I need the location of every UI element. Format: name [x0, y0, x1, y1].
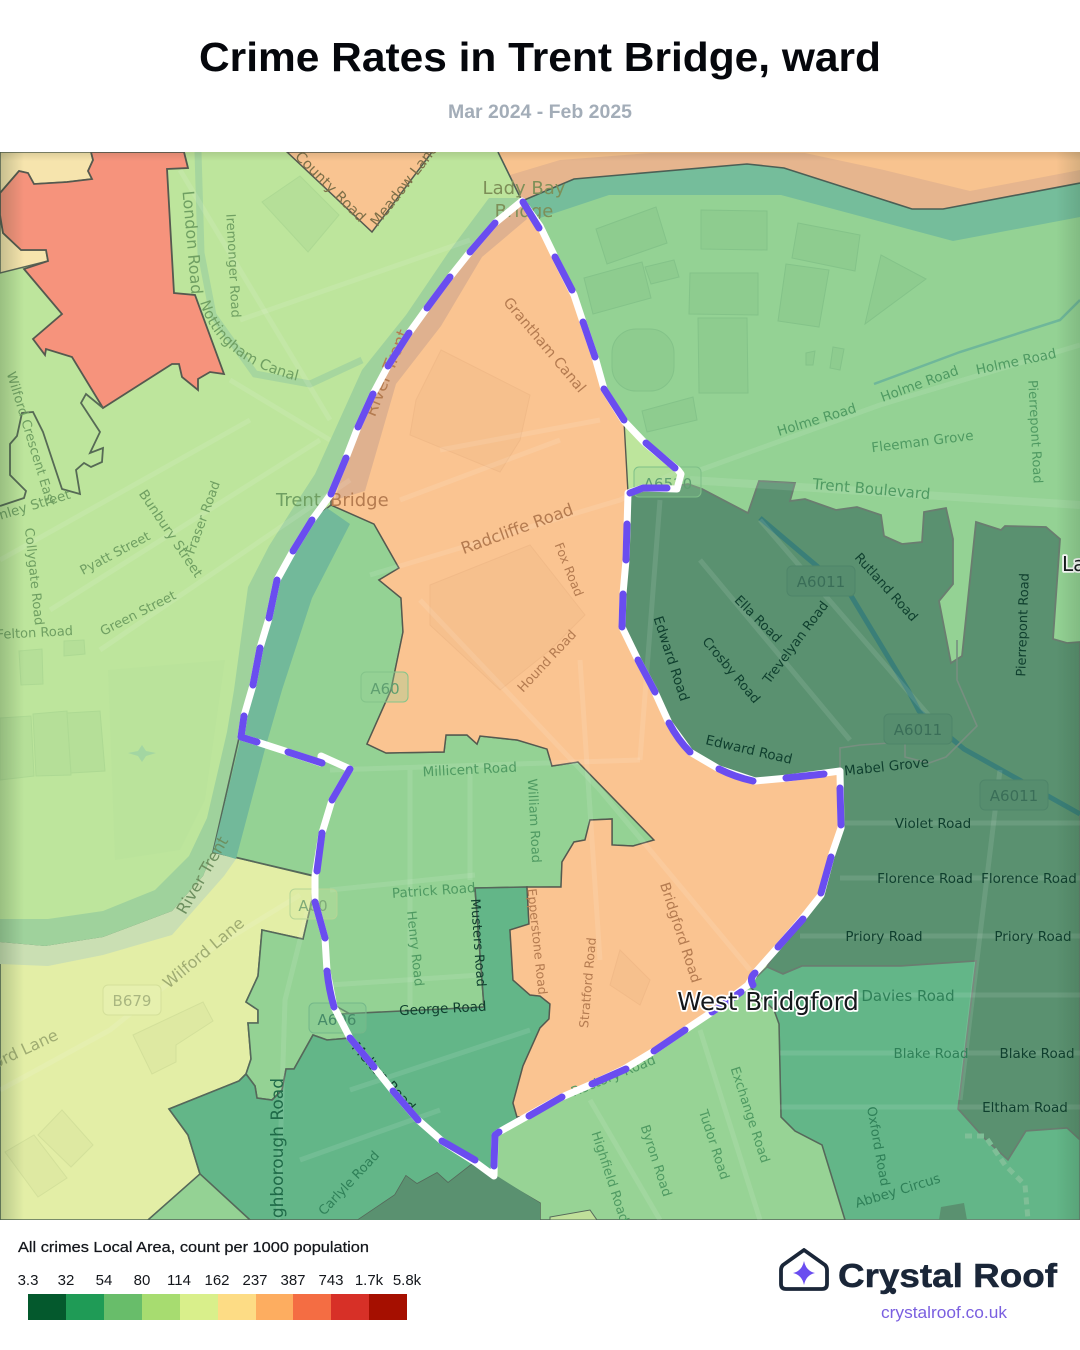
legend values: 237	[242, 1272, 268, 1289]
labels: south east: Oxford Road	[863, 1105, 892, 1187]
labels: south and centre: Tudor Road	[695, 1107, 732, 1182]
labels: west: Collygate Road	[21, 527, 46, 626]
area: small mid green south west	[148, 1174, 250, 1220]
teal river south of bridge	[213, 508, 350, 859]
labels: dark area: Crosby Road	[699, 635, 763, 707]
labels: south and centre	[391, 760, 772, 1224]
area: medium green south east	[748, 961, 1080, 1220]
area: outlined district west	[0, 394, 103, 506]
legend values	[18, 1272, 422, 1289]
legend	[18, 1239, 422, 1320]
labels: west: Green Street	[98, 588, 179, 639]
labels: dark area: Edward Road	[650, 614, 692, 703]
area: yellow lower left	[0, 852, 313, 1220]
logo	[779, 1248, 1058, 1322]
map edge shading	[0, 152, 1080, 1220]
labels: ward: River Trent	[361, 326, 414, 419]
labels: south and centre: Millicent Road	[422, 760, 517, 780]
shield: A606: A606	[318, 1011, 356, 1029]
labels: east: Holme Road	[878, 363, 961, 406]
labels: ward: Hound Road	[515, 628, 580, 696]
railway tracks	[965, 1136, 1028, 1220]
labels: south and centre: Patrick Road	[391, 880, 476, 902]
stadium tints in ward	[410, 350, 650, 1005]
labels: lady bay bridge: Lady Bay	[483, 178, 566, 199]
area: mid green east	[522, 164, 1080, 700]
legend colour scale	[28, 1294, 407, 1320]
ward boundary	[241, 201, 841, 1176]
labels: south and centre: Byron Road	[637, 1123, 674, 1199]
labels: east: Holme Road	[775, 401, 858, 440]
labels: east: Holme Road	[975, 346, 1058, 378]
gray boundary lines in dark area	[840, 640, 977, 770]
subtitle: Mar 2024 - Feb 2025	[448, 102, 632, 123]
logo website: crystalroof.co.uk	[881, 1304, 1008, 1322]
shield: A60 north	[361, 672, 408, 702]
labels: west: Fraser Road	[184, 479, 224, 556]
labels: ward: Bridge	[330, 490, 389, 511]
area: pale yellow top left	[0, 152, 93, 273]
buildings on yellow	[5, 1002, 213, 1197]
labels: ward: Epperstone Road	[524, 888, 551, 995]
labels: county road and meadow lane	[291, 141, 442, 230]
labels: dark area: George Road	[399, 999, 487, 1019]
labels: south east: Abbey Circus	[853, 1171, 942, 1212]
labels: west: Pyatt Street	[78, 529, 153, 579]
logo keyhole dot	[890, 1288, 896, 1294]
labels: west: Nottingham Canal	[200, 300, 298, 380]
shield: A60 south: A60	[298, 897, 328, 915]
title: Crime Rates in Trent Bridge, ward	[199, 34, 881, 80]
labels: ward: Grantham Canal	[500, 295, 588, 396]
labels: east: Pierrepont Road	[1024, 380, 1045, 484]
footer	[18, 1239, 1058, 1322]
shield: A60 north: A60	[370, 680, 400, 698]
legend values: 3.3	[18, 1272, 38, 1289]
legend values: 162	[204, 1272, 230, 1289]
shield: B679: B679	[113, 992, 151, 1010]
area: red high crime	[0, 152, 224, 408]
labels: dark area: Melton Road	[348, 1040, 418, 1115]
labels: south east: Blake Road	[893, 1046, 969, 1062]
legend values: 32	[58, 1272, 74, 1289]
shield: A6011 centre	[884, 714, 952, 744]
legend values: 743	[318, 1272, 344, 1289]
legend values: 387	[280, 1272, 306, 1289]
shield: A6520	[634, 467, 701, 497]
labels: west: London Road	[178, 190, 206, 295]
nottingham canal water	[198, 152, 362, 384]
legend title: All crimes Local Area, count per 1000 population	[18, 1239, 369, 1256]
labels: dark area: Musters Road	[467, 898, 488, 987]
area: orange ward interior	[331, 201, 841, 1117]
labels: dark area: Violet Road	[895, 816, 971, 832]
labels: ward: Radcliffe Road	[458, 500, 576, 558]
base area: low crime light green	[0, 152, 1080, 1220]
labels: south and centre: Henry Road	[403, 910, 426, 987]
canal east	[874, 300, 1080, 384]
labels: west: Bunbury Street	[135, 487, 206, 581]
labels: lady bay bridge: Bridge	[495, 201, 553, 222]
river trent band west	[0, 198, 522, 946]
river trent teal east	[522, 164, 1080, 241]
park tint west	[108, 660, 225, 860]
labels: dark area: Rutland Road	[851, 550, 920, 625]
river on orange strip	[510, 153, 1080, 209]
ward boundary: purple dashes	[241, 202, 841, 1166]
labels: west: Iremonger Road	[222, 213, 243, 318]
labels: dark area: Priory Road	[994, 929, 1072, 945]
ward boundary: white base line	[241, 201, 841, 1176]
labels: south and centre: Rectory Road	[569, 1052, 658, 1101]
place label: West Bridgford: West Bridgford	[677, 987, 859, 1016]
labels: dark area: Trevelyan Road	[760, 599, 832, 688]
area: dark green east	[622, 481, 1080, 1160]
header	[199, 34, 881, 123]
shield: A6011 centre: A6011	[894, 721, 942, 739]
river channel in dark area	[760, 518, 1080, 814]
labels: yellow area: Wilford Lane	[159, 913, 248, 992]
area: mid green south	[494, 985, 845, 1220]
labels: yellow area	[0, 833, 248, 1085]
legend values: 114	[167, 1272, 191, 1289]
shield: B679	[103, 985, 161, 1015]
area: mid green west of ward	[213, 505, 654, 1014]
legend values: 5.8k	[393, 1272, 422, 1289]
labels: dark area: Edward Road	[704, 732, 794, 768]
river band on yellow	[0, 852, 236, 966]
shield: A60 south	[290, 889, 337, 919]
labels: south east	[268, 987, 969, 1249]
area: orange county road wedge	[287, 152, 432, 232]
labels: dark area: Florence Road	[877, 871, 973, 887]
map	[0, 152, 1080, 1220]
labels: ward: Bridgford Road	[656, 881, 704, 985]
area: mid green south west	[246, 900, 350, 1100]
labels: east: Trent Boulevard	[811, 475, 931, 503]
labels: dark area: Mabel Grove	[843, 755, 930, 779]
labels: ward: Stratford Road	[576, 937, 599, 1028]
labels: west	[0, 190, 326, 643]
labels: south east: Carlyle Road	[316, 1148, 383, 1219]
area: dark green bottom	[358, 1162, 540, 1220]
labels: dark area: Blake Road	[999, 1046, 1075, 1062]
small dark patch south east	[939, 1203, 967, 1220]
river boundary line east	[498, 152, 1080, 209]
shield: A606	[309, 1003, 366, 1033]
labels: dark area: Eltham Road	[982, 1100, 1068, 1116]
labels: dark area: Ella Road	[731, 593, 784, 646]
legend values: 80	[134, 1272, 150, 1289]
road network	[0, 170, 1080, 1220]
shield: A6011 north	[787, 566, 855, 596]
labels: ward: Fox Road	[552, 540, 587, 598]
shield: A6011 north: A6011	[797, 573, 845, 591]
logo wordmark: Crystal Roof	[838, 1257, 1058, 1294]
shield: A6011 east	[980, 780, 1048, 810]
labels: dark area	[348, 550, 1077, 1116]
labels: south east: Davies Road	[861, 987, 955, 1005]
shield: A6011 east: A6011	[990, 787, 1038, 805]
labels: lady bay bridge	[483, 178, 566, 222]
labels: south and centre: William Road	[524, 778, 543, 863]
labels: dark area: Priory Road	[845, 929, 923, 945]
labels: south and centre: Exchange Road	[727, 1065, 772, 1165]
labels: yellow area: River Trent	[172, 833, 232, 917]
shield: A6520: A6520	[644, 475, 692, 493]
labels: dark area: Florence Road	[981, 871, 1077, 887]
legend values: 1.7k	[355, 1272, 384, 1289]
logo icon: house with star	[781, 1250, 827, 1289]
park pond	[128, 745, 156, 762]
park pitches west	[0, 176, 339, 780]
small pale area south	[550, 1210, 597, 1220]
sports pitches	[584, 207, 926, 432]
area: orange top strip	[498, 152, 1080, 209]
legend values: 54	[96, 1272, 112, 1289]
road number shields	[103, 467, 1048, 1033]
labels: west: Wilford Crescent East	[3, 370, 58, 508]
labels: east: Fleeman Grove	[871, 428, 974, 456]
labels: ward	[330, 295, 704, 1028]
labels: east	[775, 346, 1058, 503]
labels: west: Trent	[275, 490, 321, 511]
labels: dark area: Pierrepont Road	[1014, 573, 1033, 677]
area: medium green centre south	[169, 887, 550, 1220]
river on orange ward	[335, 201, 527, 500]
